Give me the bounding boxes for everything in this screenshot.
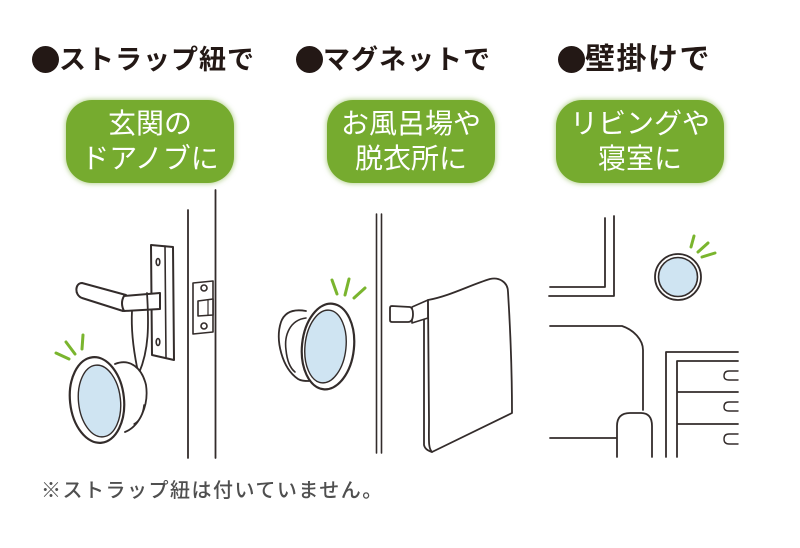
heading: strap: ストラップ紐で [59,45,255,75]
pill: living and bedroom: 寝室に [598,143,682,174]
heading: wall: 壁掛けで [585,43,711,76]
pill: bath and changing room [327,100,495,183]
heading: magnet: マグネットで [323,45,491,75]
illustration: magnet and towel [279,214,512,453]
pill: entrance door knob: 玄関の [108,108,192,139]
illustration: door knob with strap [56,190,216,458]
pill: entrance door knob: ドアノブに [81,143,219,174]
illustration: wall mirror and room [549,216,738,457]
pill: living and bedroom: リビングや [570,108,710,139]
pill: living and bedroom [556,100,724,183]
pill: bath and changing room: お風呂場や [341,108,481,139]
pill: entrance door knob [66,100,234,183]
footnote: ※ストラップ紐は付いていません。 [41,480,384,502]
pill: bath and changing room: 脱衣所に [355,143,467,174]
